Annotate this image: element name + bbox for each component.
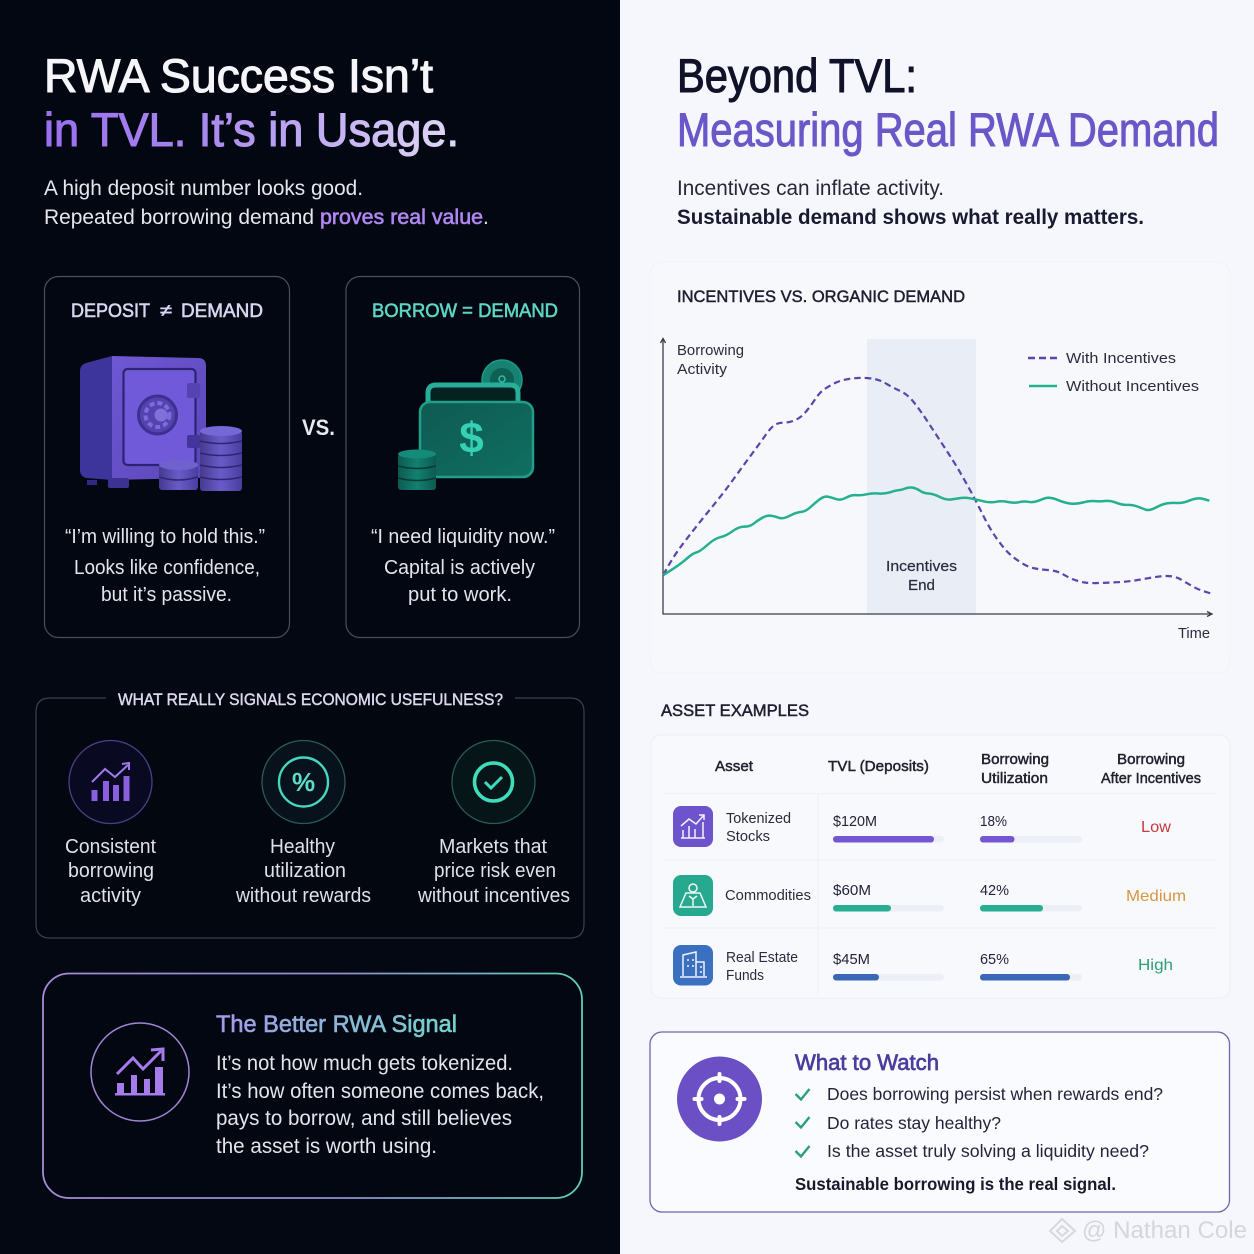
deposit heading: ≠: [160, 301, 172, 320]
signal body: pays to borrow, and still believes: [216, 1107, 512, 1130]
row: tokenized stocks: Stocks: [726, 829, 770, 845]
tall coin stack: [200, 426, 242, 491]
panel: economic usefulness signals: [36, 691, 584, 938]
table header: Borrowing: [981, 752, 1049, 768]
row: commodities: $60M: [833, 883, 871, 899]
signal heading: The Better RWA Signal: [216, 1011, 457, 1038]
left title: RWA Success Isn’t: [44, 49, 433, 102]
label: [235, 836, 371, 907]
borrow text: Capital is actively: [384, 557, 535, 579]
checklist: [796, 1084, 1163, 1161]
label: price risk even: [434, 860, 556, 882]
label: utilization: [264, 860, 346, 882]
legend: With Incentives: [1066, 351, 1176, 367]
label: [417, 836, 570, 907]
signal body: the asset is worth using.: [216, 1135, 437, 1158]
table header: After Incentives: [1101, 771, 1201, 787]
signal: healthy utilization: [235, 740, 371, 907]
line: with incentives: [663, 378, 1210, 593]
row: tokenized stocks: Low: [1141, 819, 1171, 836]
green coin stack: [398, 450, 436, 490]
watch heading: What to Watch: [795, 1050, 939, 1075]
row: commodities: Medium: [1126, 888, 1186, 905]
table header: Asset: [715, 759, 753, 775]
label: borrowing: [68, 860, 154, 882]
label: Consistent: [65, 836, 156, 858]
icon: percent: %: [292, 767, 315, 797]
table header: Utilization: [981, 771, 1048, 787]
row: commodities: 42%: [980, 883, 1009, 899]
row: tokenized stocks: $120M: [833, 814, 877, 830]
left subtitle: .: [483, 206, 489, 229]
right subtitle: Incentives can inflate activity.: [677, 177, 944, 200]
y axis label: Activity: [677, 362, 728, 378]
borrow text: put to work.: [408, 584, 512, 606]
chart heading: INCENTIVES VS. ORGANIC DEMAND: [677, 287, 965, 306]
right subtitle: Sustainable demand shows what really matters.: [677, 206, 1144, 229]
icon: commodities: [673, 875, 713, 916]
deposit text: “I’m willing to hold this.”: [65, 526, 265, 548]
panel: asset table: [651, 735, 1230, 998]
row: real estate funds: 65%: [980, 952, 1009, 968]
panel: deposit card: [44, 276, 290, 638]
icon: building: [673, 945, 713, 986]
left subtitle: Repeated borrowing demand: [44, 206, 314, 229]
deposit heading: DEPOSIT: [71, 300, 150, 322]
icon: bar chart trend: [69, 740, 152, 824]
borrow heading: BORROW = DEMAND: [372, 300, 558, 322]
icon: check circle: [452, 740, 535, 824]
label: activity: [80, 885, 141, 907]
left subtitle: A high deposit number looks good.: [44, 177, 363, 200]
label: without rewards: [235, 885, 371, 907]
left dark panel: [0, 0, 620, 1254]
icon: safe with coins: [80, 356, 242, 491]
row: commodities: Commodities: [725, 888, 811, 904]
right title: [677, 49, 1219, 156]
checklist: Do rates stay healthy?: [827, 1113, 1001, 1133]
left subtitle: [44, 177, 489, 229]
signal body: It’s how often someone comes back,: [216, 1080, 544, 1103]
borrow text: “I need liquidity now.”: [371, 526, 555, 548]
signal: consistent borrowing: [65, 740, 156, 907]
table header: [715, 752, 1201, 787]
legend: [1028, 351, 1199, 395]
legend: Without Incentives: [1066, 379, 1199, 395]
icon: percent: [262, 740, 345, 824]
y axis label: Borrowing: [677, 343, 744, 359]
deposit text: Looks like confidence,: [74, 557, 260, 579]
row: tokenized stocks: 18%: [980, 814, 1007, 830]
row: real estate funds: [673, 945, 1173, 986]
deposit heading: [71, 300, 263, 322]
panel: what to watch: [650, 1032, 1230, 1212]
panel: borrow card: [346, 276, 580, 638]
row: tokenized stocks: Tokenized: [726, 811, 791, 827]
band: incentives end: End: [908, 578, 935, 594]
watch conclusion: Sustainable borrowing is the real signal.: [795, 1174, 1116, 1194]
watermark: @ Nathan Cole: [1082, 1217, 1247, 1244]
panel: chart card: [650, 262, 1230, 673]
signal: risk pricing: [417, 740, 570, 907]
row: commodities: [673, 875, 1186, 916]
icon: wallet with coins: $: [459, 414, 484, 463]
label: [65, 836, 156, 907]
label: Markets that: [439, 836, 547, 858]
icon: wallet with coins: [398, 360, 533, 490]
icon: growth chart in circle: [91, 1023, 189, 1121]
icon: target: [677, 1056, 762, 1142]
vs label: VS.: [302, 415, 335, 440]
label: Healthy: [270, 836, 335, 858]
row: tokenized stocks: [673, 806, 1171, 847]
right title: Beyond TVL:: [677, 49, 917, 102]
deposit text: but it’s passive.: [101, 584, 232, 606]
line: without incentives: [663, 487, 1209, 575]
signals heading: WHAT REALLY SIGNALS ECONOMIC USEFULNESS?: [118, 691, 503, 709]
row: real estate funds: High: [1138, 957, 1173, 974]
table header: Borrowing: [1117, 752, 1185, 768]
table heading: ASSET EXAMPLES: [661, 701, 809, 720]
right subtitle: [677, 177, 1144, 229]
band: incentives end: Incentives: [886, 559, 957, 575]
axes: [660, 338, 1212, 616]
borrow text: [371, 526, 555, 606]
band: incentives end: [867, 339, 976, 614]
signal body: It’s not how much gets tokenized.: [216, 1052, 513, 1075]
dividers: [663, 794, 1216, 995]
deposit heading: DEMAND: [181, 300, 263, 322]
line chart: [660, 338, 1212, 642]
small coin stack: [159, 460, 198, 490]
panel: the better RWA signal: [43, 974, 582, 1198]
x axis label: Time: [1178, 626, 1210, 642]
left title: in TVL. It’s in Usage.: [44, 103, 459, 156]
signal body: [216, 1052, 544, 1158]
row: real estate funds: Real Estate: [726, 950, 798, 966]
checklist: Does borrowing persist when rewards end?: [827, 1084, 1163, 1104]
label: without incentives: [417, 885, 570, 907]
icon: stocks: [673, 806, 713, 847]
deposit text: [65, 526, 265, 606]
row: real estate funds: $45M: [833, 952, 870, 968]
left title: [44, 49, 459, 156]
checklist: Is the asset truly solving a liquidity need?: [827, 1141, 1149, 1161]
right light panel: [620, 0, 1254, 1254]
table header: TVL (Deposits): [828, 759, 929, 775]
y axis label: [677, 343, 744, 378]
left subtitle: proves real value: [320, 206, 483, 229]
row: real estate funds: Funds: [726, 968, 764, 984]
